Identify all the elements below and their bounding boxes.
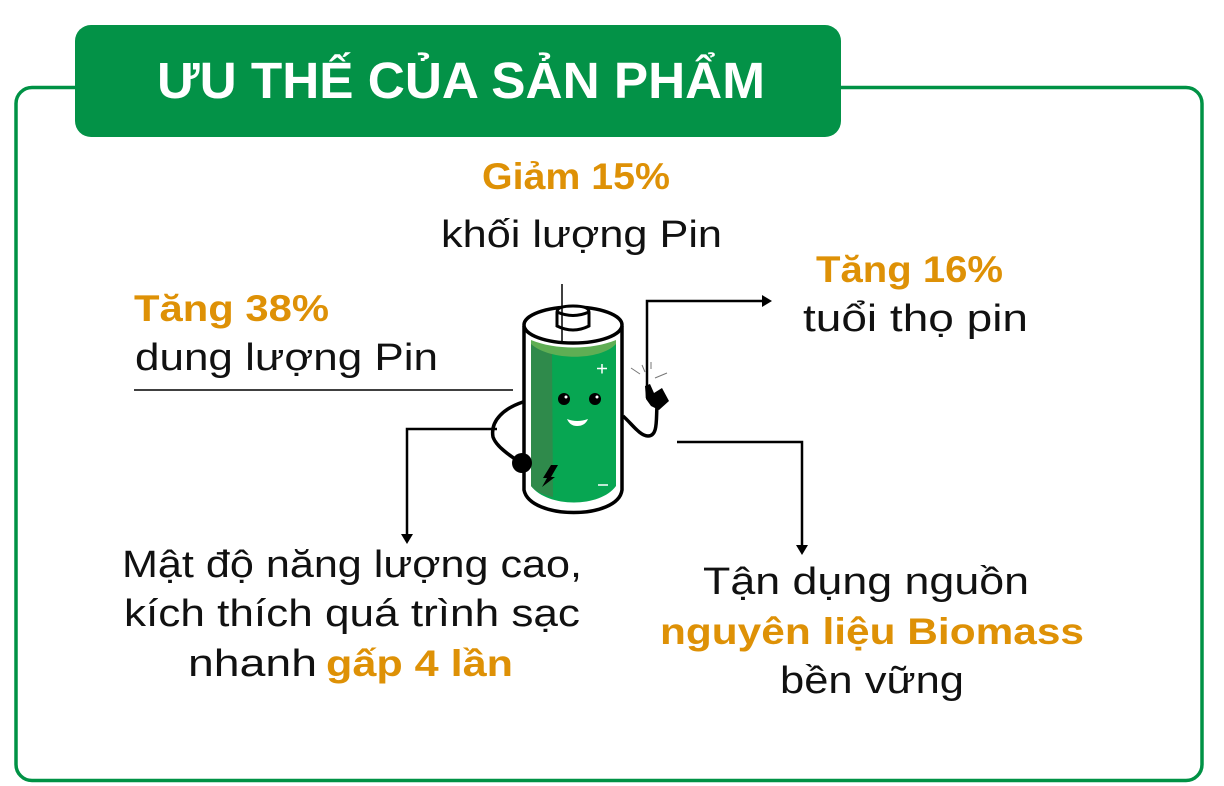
text block: giảm 15% khối lượng pin <box>441 156 722 256</box>
text block: tăng 16% tuổi thọ pin: Tăng 16% <box>816 249 1003 290</box>
arrow: to mật độ năng lượng <box>401 429 497 544</box>
text block: tăng 38% dung lượng pin: dung lượng Pin <box>135 337 438 379</box>
eyes <box>558 393 570 405</box>
text block: mật độ năng lượng cao: Mật độ năng lượng cao, <box>122 544 582 586</box>
arrow: to nguyên liệu biomass <box>677 442 808 555</box>
text block: mật độ năng lượng cao: kích thích quá trình sạc <box>124 593 580 635</box>
battery liquid top <box>531 340 616 357</box>
battery shadow side <box>531 342 553 497</box>
text block: nguyên liệu biomass: nguyên liệu Biomass <box>660 611 1084 652</box>
text block: nguyên liệu biomass: Tận dụng nguồn <box>703 561 1029 603</box>
icon: battery character <box>493 306 669 512</box>
right arm <box>623 406 657 436</box>
battery liquid <box>531 342 616 502</box>
minus sign <box>598 484 608 486</box>
battery terminal <box>557 306 589 330</box>
text block: giảm 15% khối lượng pin: Giảm 15% <box>482 156 670 197</box>
right hand <box>645 384 669 410</box>
text block: mật độ năng lượng cao <box>122 544 582 685</box>
arrow: to tuổi thọ pin <box>647 295 772 398</box>
text block: nguyên liệu biomass <box>660 561 1084 702</box>
text block: mật độ năng lượng cao: gấp 4 lần <box>326 643 513 684</box>
text block: tăng 38% dung lượng pin <box>134 288 438 379</box>
text block: tăng 38% dung lượng pin: Tăng 38% <box>134 288 329 329</box>
left hand <box>512 453 532 473</box>
spark lines <box>631 362 667 378</box>
arrow: left underline <box>134 389 513 391</box>
smile <box>567 419 588 426</box>
left arm <box>493 402 523 462</box>
text block: mật độ năng lượng cao: nhanh <box>188 643 317 685</box>
text block: nguyên liệu biomass: bền vững <box>780 660 964 702</box>
arrow: top leader line <box>561 284 563 342</box>
text block: giảm 15% khối lượng pin: khối lượng Pin <box>441 214 722 256</box>
plus sign <box>597 364 607 374</box>
battery outline <box>524 326 622 512</box>
text block: tăng 16% tuổi thọ pin <box>803 249 1028 340</box>
title banner <box>75 25 841 137</box>
lightning bolt <box>542 465 558 487</box>
title: ƯU THẾ CỦA SẢN PHẨM <box>157 51 765 109</box>
text block: tăng 16% tuổi thọ pin: tuổi thọ pin <box>803 298 1028 340</box>
